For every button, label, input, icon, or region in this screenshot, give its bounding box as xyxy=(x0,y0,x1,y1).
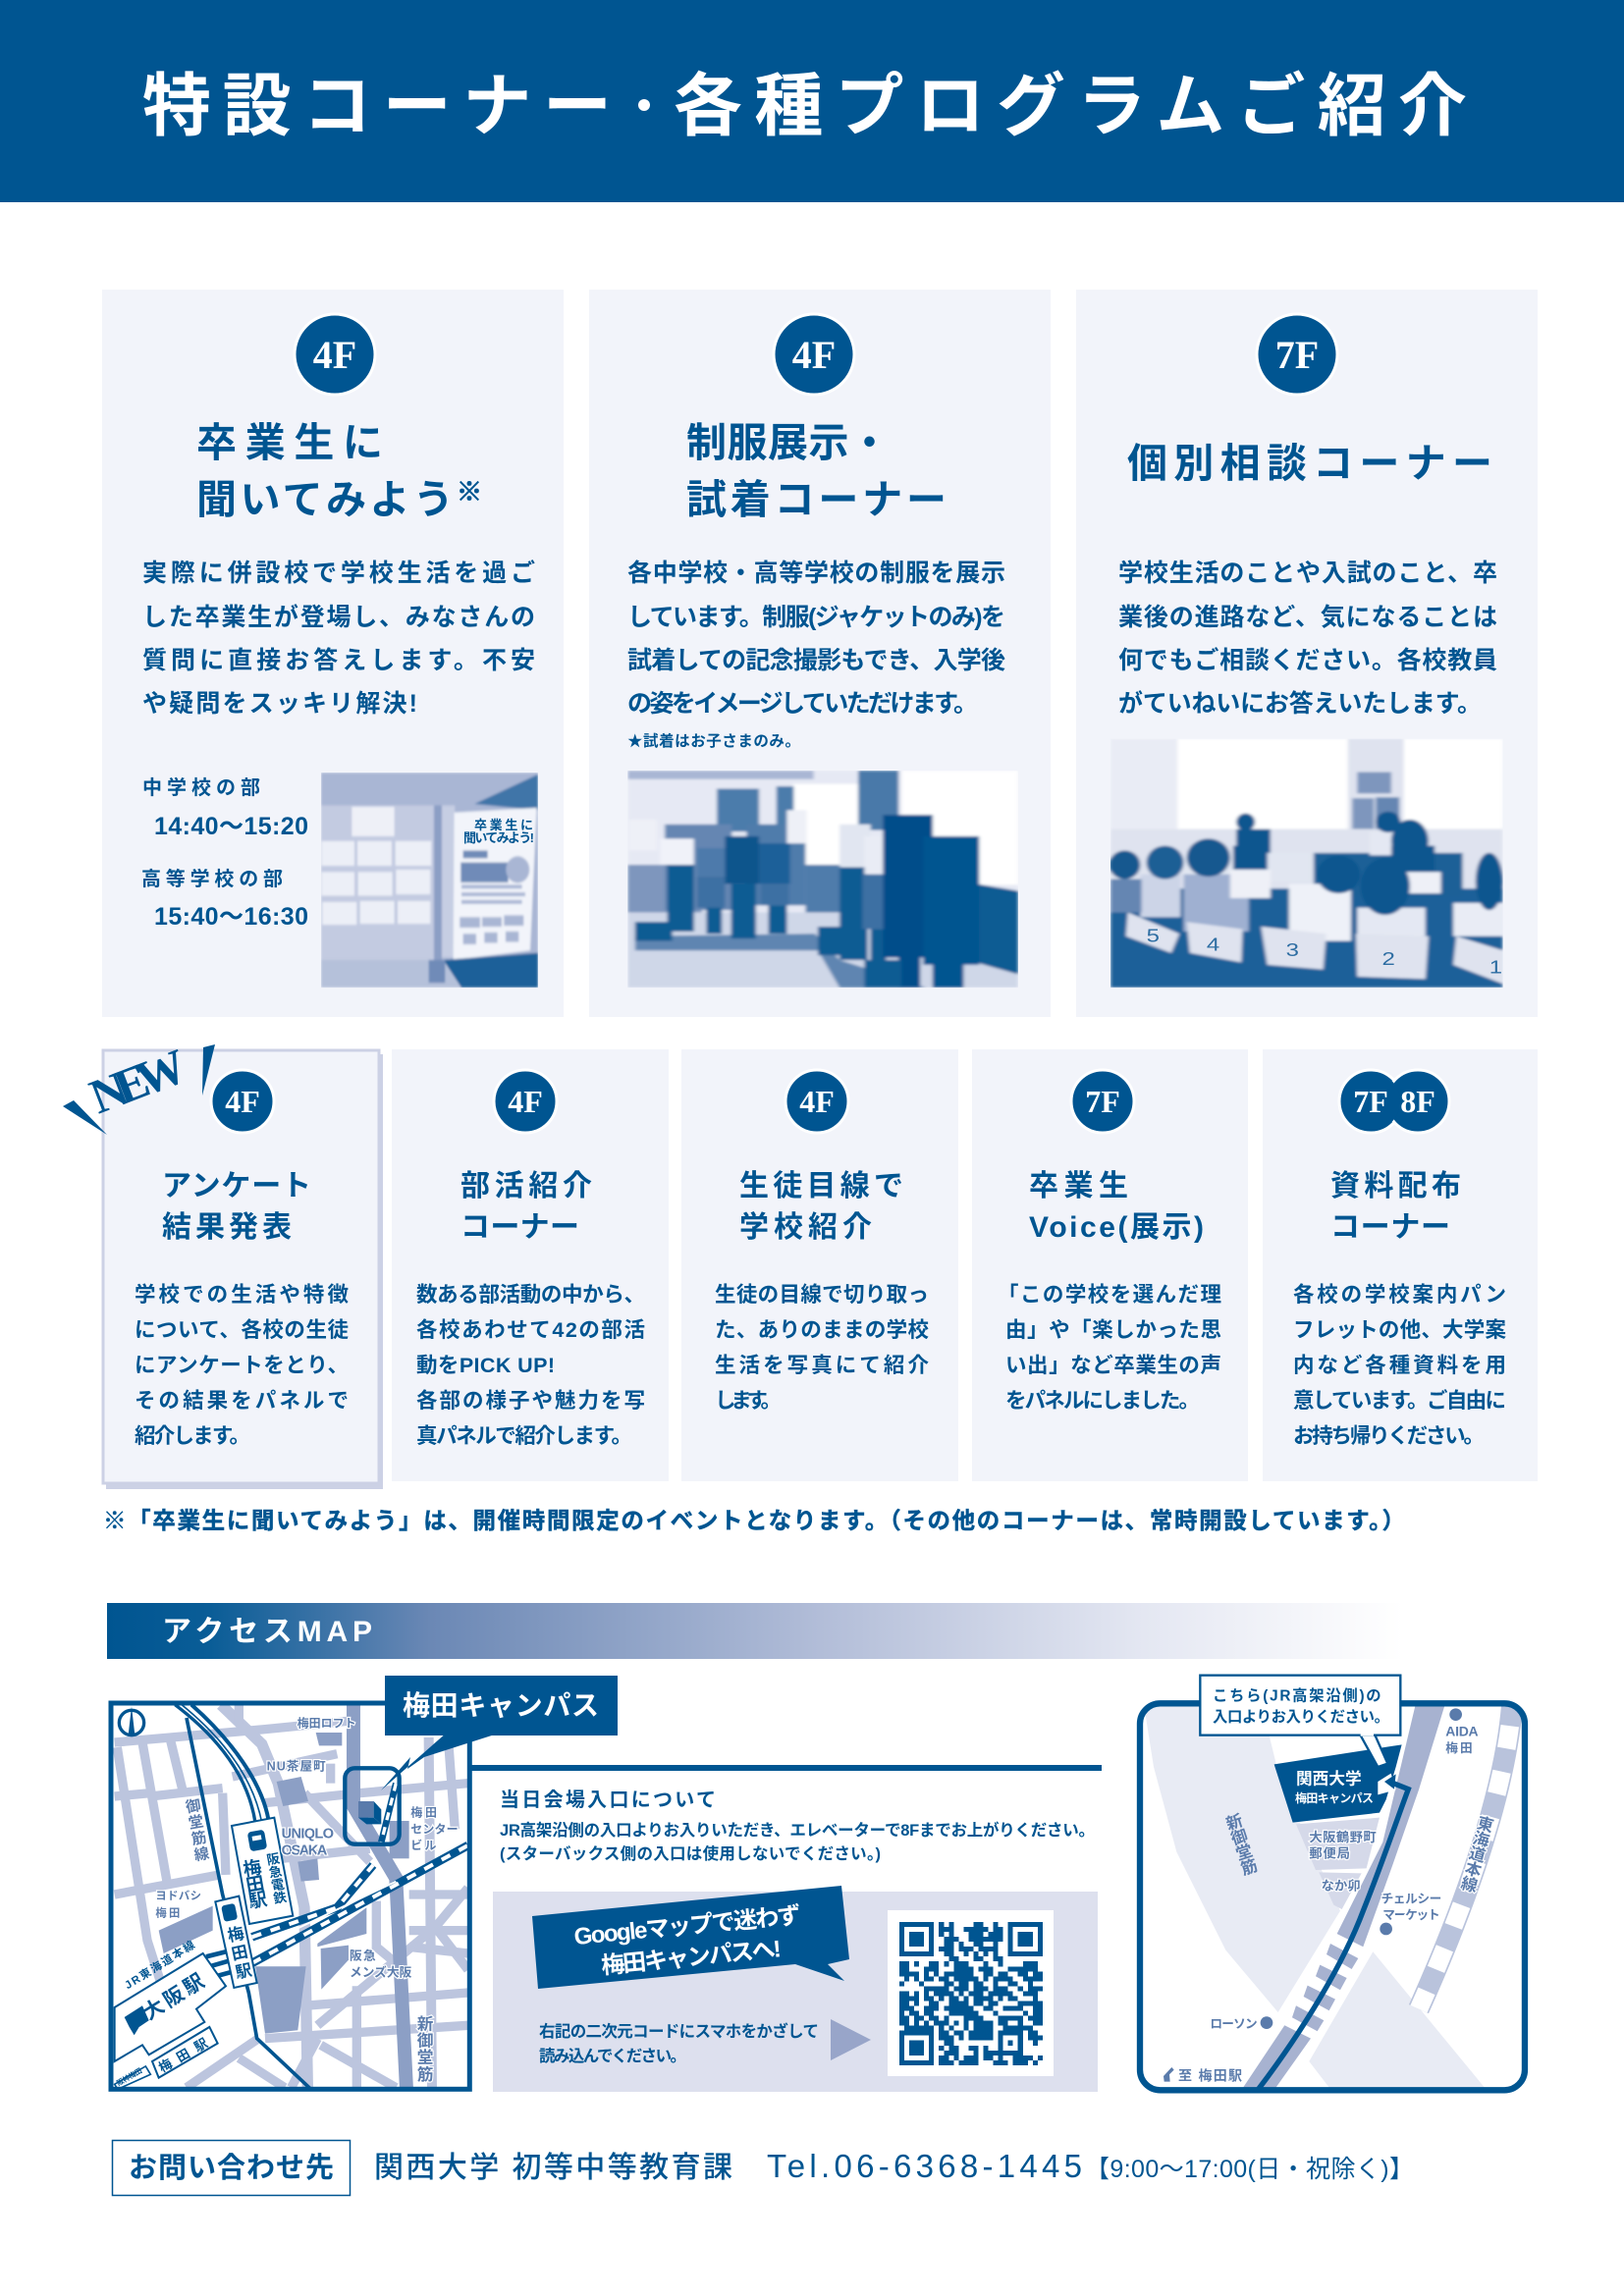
entrance info text: JR高架沿側の入口よりお入りいただき、エレベーターで8Fまでお上がりください。 xyxy=(500,1820,1095,1840)
photo: consultation room: 3 xyxy=(1286,940,1299,960)
description: 数ある部活動の中から、 xyxy=(416,1283,645,1307)
station: JR Umeda box xyxy=(215,1896,257,1988)
panel: consultation xyxy=(1076,290,1538,1017)
Tokaido line xyxy=(1419,1706,1512,2009)
photo: consultation room: 1 xyxy=(1489,957,1502,978)
description: 動をPICK UP! xyxy=(416,1354,555,1377)
floor badge 4F: 4F xyxy=(225,1084,260,1119)
map frame xyxy=(1140,1703,1525,2090)
post office and shop blocks xyxy=(1296,1818,1380,1870)
schedule: 高等学校の部 xyxy=(141,868,283,890)
description: 何でもご相談ください。各校教員 xyxy=(1118,646,1497,674)
description: 各校の学校案内パン xyxy=(1293,1283,1506,1307)
photo: consultation room: 4 xyxy=(1207,934,1219,955)
map labels: ローソン xyxy=(1210,2017,1258,2031)
heading: 卒業生 xyxy=(1029,1170,1128,1202)
panel: uniforms xyxy=(589,290,1051,1017)
map labels: 新御堂筋 xyxy=(414,2014,433,2082)
description: 「この学校を選んだ理 xyxy=(998,1283,1221,1307)
entrance info text: (スターバックス側の入口は使用しないでください。) xyxy=(500,1844,881,1863)
description: 各校あわせて42の部活 xyxy=(416,1318,645,1342)
map labels: 阪急 xyxy=(350,1949,376,1963)
map labels: UNIQLO xyxy=(282,1827,334,1842)
description: 業後の進路など、気になることは xyxy=(1118,604,1497,631)
map labels: 新御堂筋 xyxy=(1221,1811,1259,1878)
heading: 学校紹介 xyxy=(739,1211,872,1244)
station: Hankyu Umeda: 梅田駅 xyxy=(240,1856,269,1911)
heading: 制服展示・ xyxy=(686,420,890,465)
dots xyxy=(1261,1708,1462,2029)
callout: entrance: 入口よりお入りください。 xyxy=(1213,1709,1389,1726)
station: Hankyu Umeda: 阪急電鉄 xyxy=(264,1850,288,1906)
description: にアンケートをとり、 xyxy=(135,1354,349,1377)
title xyxy=(142,68,1467,144)
map labels: 梅田 xyxy=(155,1906,180,1920)
map labels: 御堂筋線 xyxy=(182,1796,210,1864)
map labels: 梅田キャンパス xyxy=(1295,1790,1374,1805)
section bar: access map xyxy=(107,1603,1403,1659)
description: しています。制服(ジャケットのみ)を xyxy=(627,604,1005,631)
callout: entrance xyxy=(1200,1676,1400,1767)
instruction text: 右記の二次元コードにスマホをかざして xyxy=(539,2021,819,2041)
callout: entrance: こちら(JR高架沿側)の xyxy=(1213,1686,1381,1704)
floor badges 7F 8F xyxy=(1339,1070,1449,1133)
description: や疑問をスッキリ解決! xyxy=(142,690,417,718)
map labels: チェルシー xyxy=(1381,1892,1441,1905)
schedule: 15:40〜16:30 xyxy=(154,903,308,931)
header band xyxy=(0,0,1624,202)
section title: アクセスMAP xyxy=(162,1616,372,1648)
speech banner xyxy=(532,1886,849,1989)
heading: 部活紹介 xyxy=(460,1170,592,1202)
contact box xyxy=(112,2140,350,2195)
station: Osaka: 大阪駅 xyxy=(139,1970,209,2025)
map labels: 至 梅田駅 xyxy=(1178,2067,1242,2083)
heading: 試着コーナー xyxy=(686,477,947,522)
map labels: NU茶屋町 xyxy=(267,1758,326,1773)
map labels: なか卯 xyxy=(1322,1878,1361,1893)
instruction text xyxy=(539,2021,819,2065)
station: Umeda south xyxy=(115,2027,218,2089)
map labels: 梅田 xyxy=(410,1805,437,1820)
panel card with shadow xyxy=(103,1050,383,1489)
map labels: ヨドバシ xyxy=(155,1890,201,1902)
description: した卒業生が登場し、みなさんの xyxy=(142,603,535,631)
callout: Umeda campus: 梅田キャンパス xyxy=(403,1690,599,1721)
description: お持ち帰りください。 xyxy=(1293,1424,1485,1448)
floor badge 4F: 4F xyxy=(792,333,836,377)
floor badge 7F: 7F xyxy=(1085,1084,1120,1119)
note: ★試着はお子さまのみ。 xyxy=(627,731,800,750)
railway tracks xyxy=(206,1784,468,1976)
heading: ※ xyxy=(457,472,482,508)
map labels: 梅田ロフト xyxy=(298,1715,356,1730)
panel: graduates xyxy=(102,290,564,1017)
heading: 生徒目線で xyxy=(739,1170,903,1202)
floor badge 4F xyxy=(211,1070,274,1133)
photo: graduates corner: 卒業生に xyxy=(474,818,533,832)
description xyxy=(998,1283,1221,1413)
map labels: センター xyxy=(410,1822,459,1836)
description: い出」など卒業生の声 xyxy=(1005,1354,1221,1377)
description: 各部の様子や魅力を写 xyxy=(416,1389,645,1413)
panel: materials xyxy=(1263,1049,1538,1481)
map labels: メンズ大阪 xyxy=(350,1964,412,1979)
campus highlight box xyxy=(345,1768,400,1844)
description: その結果をパネルで xyxy=(135,1389,349,1413)
floor badges 7F 8F: 8F xyxy=(1400,1084,1435,1119)
heading: 資料配布 xyxy=(1330,1170,1461,1202)
map labels: 梅田 xyxy=(1445,1740,1473,1755)
elevated tracks xyxy=(1337,1705,1445,1947)
contact details: Tel.06-6368-1445 xyxy=(767,2148,1082,2184)
description: 生徒の目線で切り取っ xyxy=(715,1283,929,1307)
map labels: JR東海道本線 xyxy=(122,1938,197,1992)
panel: google maps QR xyxy=(493,1886,1098,2092)
floor badge 4F xyxy=(295,314,375,395)
description: 真パネルで紹介します。 xyxy=(416,1424,632,1448)
heading: 結果発表 xyxy=(162,1211,292,1244)
heading: 個別相談コーナー xyxy=(1127,441,1492,486)
title: 各種プログラムご紹介 xyxy=(674,68,1467,144)
north mark xyxy=(119,1706,144,1735)
floor badge 4F: 4F xyxy=(508,1084,543,1119)
description xyxy=(142,559,535,718)
map frame xyxy=(111,1703,469,2089)
description: 各中学校・高等学校の制服を展示 xyxy=(627,560,1005,587)
main road: Shin-Midosuji xyxy=(353,1703,406,2089)
photo: consultation room xyxy=(1110,739,1503,988)
description: 由」や「楽しかった思 xyxy=(1005,1318,1221,1342)
contact details: 関西大学 初等中等教育課 xyxy=(374,2152,732,2184)
map labels: マーケット xyxy=(1382,1908,1440,1922)
description: 紹介します。 xyxy=(135,1424,250,1448)
schedule xyxy=(141,776,308,931)
heading: コーナー xyxy=(1330,1211,1450,1244)
heading: アンケート xyxy=(162,1170,311,1202)
heading xyxy=(739,1170,903,1244)
contact box: お問い合わせ先 xyxy=(129,2152,334,2184)
photo: graduates corner xyxy=(321,773,538,988)
description: 質問に直接お答えします。不安 xyxy=(142,647,535,674)
station: Umeda south: 阪神梅田 xyxy=(115,2066,143,2088)
route line xyxy=(1259,1782,1408,2089)
description xyxy=(715,1283,929,1413)
station: Osaka xyxy=(115,1953,226,2061)
heading: Voice(展示) xyxy=(1029,1211,1204,1244)
QR code xyxy=(888,1910,1054,2076)
station: Umeda south: 梅田駅 xyxy=(155,2035,211,2075)
contact details: 【9:00〜17:00(日・祝除く)】 xyxy=(1085,2156,1414,2183)
divider xyxy=(470,1765,1102,1771)
station: JR Umeda box: 梅田駅 xyxy=(223,1924,253,1982)
map labels xyxy=(1164,1723,1495,2083)
map labels xyxy=(122,1715,459,2082)
panel: graduate voice xyxy=(972,1049,1248,1481)
description: 内など各種資料を用 xyxy=(1293,1354,1506,1377)
floor badge 4F xyxy=(494,1070,557,1133)
heading xyxy=(686,420,947,522)
map labels: AIDA xyxy=(1445,1723,1479,1738)
description: について、各校の生徒 xyxy=(135,1318,349,1342)
description: 試着しての記念撮影もでき、入学後 xyxy=(627,647,1005,674)
campus building xyxy=(1274,1744,1402,1823)
heading: 聞いてみよう xyxy=(196,477,454,522)
map labels: 郵便局 xyxy=(1309,1846,1350,1861)
description: 意しています。ご自由に xyxy=(1293,1388,1506,1413)
footnote: ※「卒業生に聞いてみよう」は、開催時間限定のイベントとなります。（その他のコーナーは、常時開設しています。） xyxy=(103,1508,1405,1533)
description xyxy=(1118,560,1497,718)
panel: clubs xyxy=(392,1049,669,1481)
description xyxy=(1293,1283,1506,1448)
map labels: 関西大学 xyxy=(1296,1768,1362,1788)
description: します。 xyxy=(715,1389,782,1413)
photo: consultation room: 5 xyxy=(1147,926,1160,946)
speech banner: 梅田キャンパスへ! xyxy=(600,1936,783,1980)
photo: uniforms xyxy=(627,771,1018,988)
floor badge 4F: 4F xyxy=(313,333,356,377)
heading xyxy=(162,1170,311,1244)
panel: student view xyxy=(681,1049,958,1481)
station: Hankyu Umeda xyxy=(232,1818,293,1924)
callout: Umeda campus xyxy=(381,1676,618,1790)
heading xyxy=(1330,1170,1461,1244)
heading: 卒業生に xyxy=(196,420,383,465)
title: 特設コーナー xyxy=(142,68,612,144)
map labels: 東海道本線 xyxy=(1457,1813,1495,1895)
floor badge 4F xyxy=(774,314,854,395)
floor badge 4F xyxy=(785,1070,848,1133)
panel: survey results (new) xyxy=(63,1038,383,1489)
floor badge 4F: 4F xyxy=(799,1084,835,1119)
description xyxy=(627,560,1005,718)
heading xyxy=(460,1170,592,1244)
floor badge 7F xyxy=(1071,1070,1134,1133)
description: た、ありのままの学校 xyxy=(715,1318,929,1342)
NEW mark: NEW xyxy=(82,1038,193,1124)
contact details xyxy=(374,2148,1414,2184)
map: Umeda area xyxy=(110,1703,469,2089)
schedule: 中学校の部 xyxy=(142,776,260,799)
heading: コーナー xyxy=(460,1211,579,1244)
map: campus entrance detail xyxy=(1137,1676,1527,2091)
description: 実際に併設校で学校生活を過ご xyxy=(142,559,535,587)
arrow xyxy=(831,2019,871,2060)
description xyxy=(416,1283,645,1448)
floor badge 7F: 7F xyxy=(1275,333,1319,377)
map labels: ビル xyxy=(410,1838,436,1852)
map labels: 大阪鶴野町 xyxy=(1309,1829,1377,1844)
instruction text: 読み込んでください。 xyxy=(539,2047,686,2065)
floor badges 7F 8F: 7F xyxy=(1353,1084,1388,1119)
description: をパネルにしました。 xyxy=(1005,1389,1200,1413)
campus building xyxy=(358,1801,381,1824)
description: がていねいにお答えいたします。 xyxy=(1118,689,1482,718)
photo: consultation room: 2 xyxy=(1382,948,1395,969)
schedule: 14:40〜15:20 xyxy=(154,813,308,840)
NEW mark xyxy=(63,1038,215,1135)
photo: graduates corner: 聞いてみよう! xyxy=(463,830,534,845)
heading xyxy=(1029,1170,1204,1244)
entrance info text: 当日会場入口について xyxy=(500,1789,716,1811)
map labels: OSAKA xyxy=(282,1842,328,1858)
speech banner: Googleマップで迷わず xyxy=(572,1902,802,1950)
description: フレットの他、大学案 xyxy=(1293,1318,1506,1342)
description xyxy=(135,1283,349,1448)
entrance info text xyxy=(500,1789,1095,1863)
floor badge 7F xyxy=(1257,314,1337,395)
heading xyxy=(196,420,482,522)
description: 学校での生活や特徴 xyxy=(135,1283,349,1307)
description: 学校生活のことや入試のこと、卒 xyxy=(1118,560,1497,587)
description: の姿をイメージしていただけます。 xyxy=(627,690,978,718)
description: 生活を写真にて紹介 xyxy=(715,1354,929,1377)
entrance notch xyxy=(1378,1774,1396,1794)
